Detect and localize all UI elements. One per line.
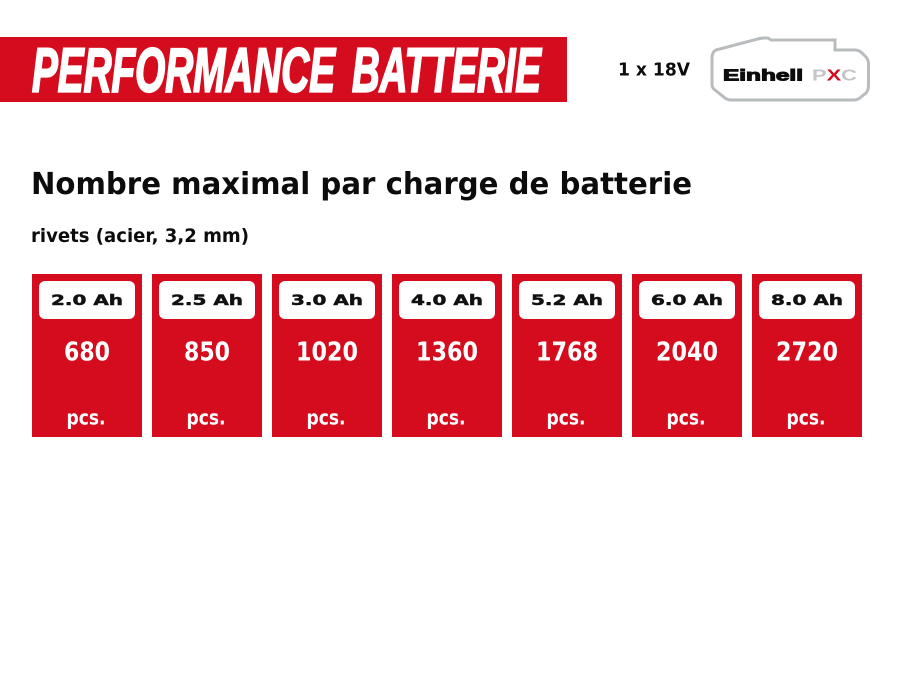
card: 3.0 Ah: 1020 xyxy=(296,338,358,368)
card: 8.0 Ah: pcs. xyxy=(786,406,826,430)
card: 5.2 Ah: 1768 xyxy=(536,338,598,368)
card: 6.0 Ah: 6.0 Ah xyxy=(651,293,723,309)
card: 3.0 Ah: 3.0 Ah xyxy=(291,293,363,309)
card: 3.0 Ah: pcs. xyxy=(306,406,346,430)
card: 4.0 Ah xyxy=(392,274,502,437)
card: 8.0 Ah: 8.0 Ah xyxy=(771,293,843,309)
icon: Einhell PXC battery xyxy=(712,38,868,100)
card: 6.0 Ah: 2040 xyxy=(656,338,718,368)
card: 2.5 Ah: 2.5 Ah xyxy=(171,293,243,309)
card: 3.0 Ah xyxy=(272,274,382,437)
card: 6.0 Ah: pcs. xyxy=(666,406,706,430)
card: 2.5 Ah: 850 xyxy=(184,338,230,368)
card: 6.0 Ah xyxy=(632,274,742,437)
banner title: BATTERIE xyxy=(352,36,542,106)
card: 2.0 Ah: 680 xyxy=(64,338,110,368)
card: 4.0 Ah: 1360 xyxy=(416,338,478,368)
subheading: rivets (acier, 3,2 mm) xyxy=(31,225,249,247)
card: 4.0 Ah: pcs. xyxy=(426,406,466,430)
heading: Nombre maximal par charge de batterie xyxy=(31,167,692,202)
card: 2.0 Ah xyxy=(32,274,142,437)
brand wordmark: Einhell xyxy=(723,68,803,84)
banner title: PERFORMANCE xyxy=(32,36,336,106)
card: 8.0 Ah xyxy=(752,274,862,437)
card: 2.0 Ah: pcs. xyxy=(66,406,106,430)
card: 2.5 Ah xyxy=(152,274,262,437)
card: 8.0 Ah: 2720 xyxy=(776,338,838,368)
card: 5.2 Ah: 5.2 Ah xyxy=(531,293,603,309)
header banner xyxy=(0,36,567,106)
card: 4.0 Ah: 4.0 Ah xyxy=(411,293,483,309)
battery quantity label: 1 x 18V xyxy=(618,60,690,80)
card: 2.5 Ah: pcs. xyxy=(186,406,226,430)
card: 2.0 Ah: 2.0 Ah xyxy=(51,293,123,309)
card: 5.2 Ah xyxy=(512,274,622,437)
card: 5.2 Ah: pcs. xyxy=(546,406,586,430)
PXC wordmark: P X C xyxy=(812,68,857,84)
